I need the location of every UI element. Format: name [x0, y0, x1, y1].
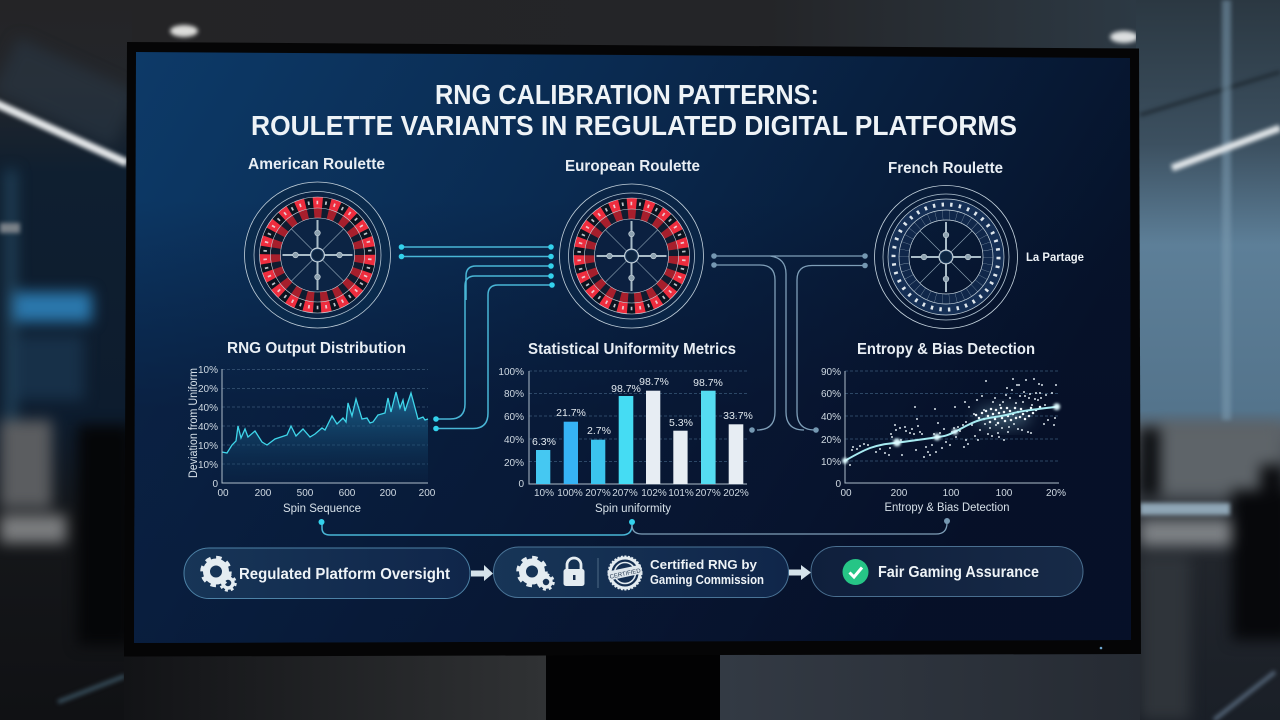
chart: uniformity bar chart: 98.7% [693, 377, 723, 389]
icon: certified seal [607, 556, 642, 590]
chart: RNG output line chart: 600 [339, 488, 356, 499]
chart: entropy scatter plot: 00 [840, 488, 852, 499]
icon: padlock [564, 558, 584, 586]
chart: entropy scatter plot: 200 [891, 488, 908, 499]
chart: RNG output line chart: 200 [380, 488, 397, 499]
chart: RNG output line chart: 10% [198, 460, 218, 471]
American roulette wheel [244, 182, 390, 328]
pill: certification: Certified RNG by [650, 558, 757, 572]
label: La Partage: La Partage [1026, 252, 1084, 264]
title: ROULETTE VARIANTS IN REGULATED DIGITAL PLATFORMS [251, 110, 1017, 141]
ceiling lights [170, 25, 1138, 43]
heading: French Roulette: French Roulette [888, 160, 1003, 177]
title [251, 79, 1017, 141]
arrow [789, 565, 811, 580]
chart: entropy scatter plot: 10% [821, 457, 841, 468]
chart: uniformity bar chart: 0 [518, 479, 524, 490]
chart: uniformity bar chart: 102% [641, 488, 667, 499]
chart: uniformity bar chart: 207% [585, 488, 611, 499]
chart: uniformity bar chart: 100% [498, 367, 524, 378]
chart: uniformity bar chart: 6.3% [532, 436, 556, 448]
chart: uniformity bar chart: 98.7% [639, 376, 669, 388]
pill: Fair Gaming Assurance [811, 546, 1083, 596]
icon: gears [518, 558, 554, 590]
chart: uniformity bar chart: Spin uniformity [595, 503, 671, 515]
heading: American Roulette: American Roulette [248, 156, 385, 173]
icon: certified seal: CERTIFIED [609, 568, 642, 581]
chart: RNG output line chart: 40% [198, 403, 218, 414]
chart: uniformity bar chart: 100% [557, 488, 583, 499]
connectors: bottom [318, 518, 950, 535]
monitor bezel [124, 42, 1141, 656]
chart: entropy scatter plot: 90% [821, 367, 841, 378]
chart: uniformity bar chart: 10% [534, 488, 554, 499]
chart: RNG output line chart: 20% [198, 384, 218, 395]
chart: uniformity bar chart: 20% [504, 458, 524, 469]
title: RNG CALIBRATION PATTERNS: [435, 79, 819, 110]
office background left [0, 0, 138, 720]
chart: uniformity bar chart: 207% [612, 488, 638, 499]
chart: uniformity bar chart: 80% [504, 389, 524, 400]
chart: entropy scatter plot: 60% [821, 389, 841, 400]
monitor stand [124, 650, 1140, 720]
chart: entropy scatter plot: 20% [821, 435, 841, 446]
chart: entropy scatter plot: 40% [821, 412, 841, 423]
chart: RNG output line chart: 200 [419, 488, 436, 499]
pill: certification [494, 547, 788, 598]
chart: uniformity bar chart: 33.7% [723, 410, 753, 422]
chart: uniformity bar chart [498, 367, 753, 515]
chart: entropy scatter plot: 20% [1046, 488, 1066, 499]
chart: RNG output line chart [188, 365, 436, 515]
heading: Statistical Uniformity Metrics: Statistical Uniformity Metrics [528, 341, 736, 358]
icon: check mark [842, 559, 868, 585]
connectors: grey [711, 253, 868, 433]
chart: RNG output line chart: 500 [297, 488, 314, 499]
chart: entropy scatter plot: 100 [996, 488, 1013, 499]
chart: uniformity bar chart: 101% [668, 488, 694, 499]
chart: uniformity bar chart: 98.7% [611, 383, 641, 395]
European roulette wheel [560, 184, 704, 328]
pill: Regulated Platform Oversight: Regulated Platform Oversight [239, 566, 450, 583]
monitor screen [134, 52, 1131, 649]
chart: uniformity bar chart: 202% [723, 488, 749, 499]
chart: RNG output line chart: Deviation from Uniform [188, 368, 200, 478]
chart: uniformity bar chart: 5.3% [669, 417, 693, 429]
office background top [0, 0, 1280, 70]
chart: RNG output line chart: 10% [198, 365, 218, 376]
pill: certification: Gaming Commission [650, 573, 764, 587]
heading: RNG Output Distribution: RNG Output Distribution [227, 340, 406, 357]
chart: uniformity bar chart: 21.7% [556, 407, 586, 419]
heading: European Roulette: European Roulette [565, 158, 700, 175]
pill: Fair Gaming Assurance: Fair Gaming Assurance [878, 564, 1039, 581]
chart: RNG output line chart: 00 [217, 488, 229, 499]
heading: Entropy & Bias Detection: Entropy & Bias Detection [857, 341, 1035, 358]
connectors: cyan [399, 244, 555, 431]
chart: RNG output line chart: 40% [198, 422, 218, 433]
chart: RNG output line chart: Spin Sequence [283, 503, 361, 515]
pill: Regulated Platform Oversight [184, 548, 470, 598]
chart: uniformity bar chart: 40% [504, 435, 524, 446]
chart: RNG output line chart: 0 [212, 479, 218, 490]
chart: uniformity bar chart: 60% [504, 412, 524, 423]
chart: uniformity bar chart: 207% [695, 488, 721, 499]
chart: RNG output line chart: 10% [198, 441, 218, 452]
chart: entropy scatter plot: 100 [943, 488, 960, 499]
chart: RNG output line chart: 200 [255, 488, 272, 499]
chart: uniformity bar chart: 2.7% [587, 425, 611, 437]
chart: entropy scatter plot: Entropy & Bias Detection [884, 502, 1010, 514]
chart: entropy scatter plot: 0 [835, 479, 841, 490]
arrow [471, 565, 493, 581]
office background right [1136, 0, 1280, 720]
icon: gears [202, 558, 236, 590]
chart: entropy scatter plot [821, 367, 1066, 514]
French roulette wheel [874, 186, 1018, 328]
